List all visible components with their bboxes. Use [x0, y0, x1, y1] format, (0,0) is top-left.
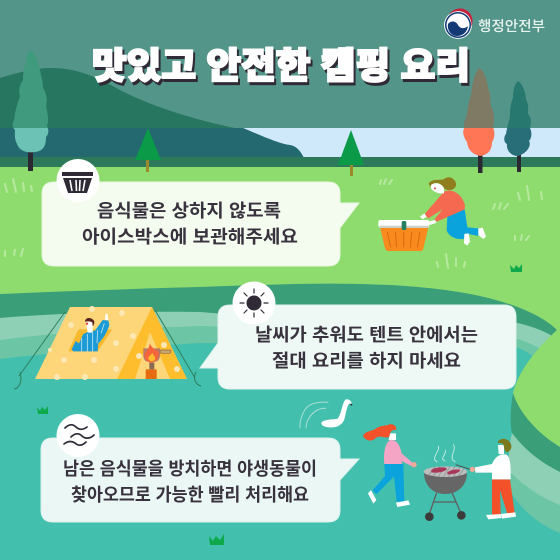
tent ropes — [14, 310, 201, 389]
bubble 1 text: 아이스박스에 보관해주세요 — [82, 227, 298, 247]
bubble 3 text: 찾아오므로 가능한 빨리 처리해요 — [71, 485, 309, 505]
bubble 3 text — [63, 459, 317, 505]
illustration: swan and barbecue — [300, 399, 516, 521]
swan — [300, 399, 352, 428]
cooler — [378, 220, 429, 251]
bubble 2 shape — [200, 305, 516, 389]
man with tongs — [456, 439, 516, 519]
title: 맛있고 안전한 캠핑 요리 — [94, 48, 472, 89]
icon: waves — [56, 414, 100, 457]
tree: small green right — [338, 130, 364, 176]
logo wordmark: 행정안전부 — [478, 18, 545, 34]
tree: small green left — [135, 128, 161, 172]
bubble 2 text — [255, 325, 478, 371]
bubble 1 text: 음식물은 상하지 않도록 — [97, 201, 281, 221]
grill — [424, 444, 467, 521]
icon: sun — [232, 282, 276, 324]
bubble 1 panel — [42, 159, 359, 266]
tree: left cypress — [13, 51, 48, 171]
bubble 3 text: 남은 음식물을 방치하면 야생동물이 — [63, 459, 317, 479]
icon: basket — [56, 159, 100, 202]
logo emblem — [444, 8, 473, 39]
bubble 1 shape — [42, 182, 359, 266]
illustration: woman with cooler — [378, 177, 486, 251]
bubble 2 text: 날씨가 추워도 텐트 안에서는 — [255, 325, 478, 345]
river bands — [0, 284, 557, 560]
bubble 3 panel — [41, 414, 359, 522]
bubble 2 panel — [200, 282, 516, 389]
title: 맛있고 안전한 캠핑 요리 — [92, 45, 470, 86]
green meadow — [0, 167, 560, 420]
tree: teal cypress — [504, 81, 531, 172]
right hill — [509, 330, 560, 560]
tent body — [35, 306, 187, 380]
grass tuft: green on meadow — [510, 264, 522, 272]
bubble 3 shape — [41, 438, 359, 522]
tent window with man — [68, 313, 112, 351]
mountain — [0, 68, 304, 160]
illustration: tent — [14, 306, 201, 389]
woman with red hair — [363, 424, 417, 507]
logo — [444, 8, 545, 39]
bubble 2 text: 절대 요리를 하지 마세요 — [272, 351, 461, 371]
bubble 1 text — [82, 201, 298, 247]
grass tufts light — [5, 179, 542, 268]
woman — [420, 177, 486, 246]
tree: orange cypress — [463, 68, 494, 173]
camp stove with flame — [143, 343, 171, 379]
grass tuft: green bottom — [209, 534, 224, 545]
grass tuft: green by tent — [37, 406, 48, 414]
lake — [0, 128, 560, 160]
far shore strip — [0, 157, 560, 167]
